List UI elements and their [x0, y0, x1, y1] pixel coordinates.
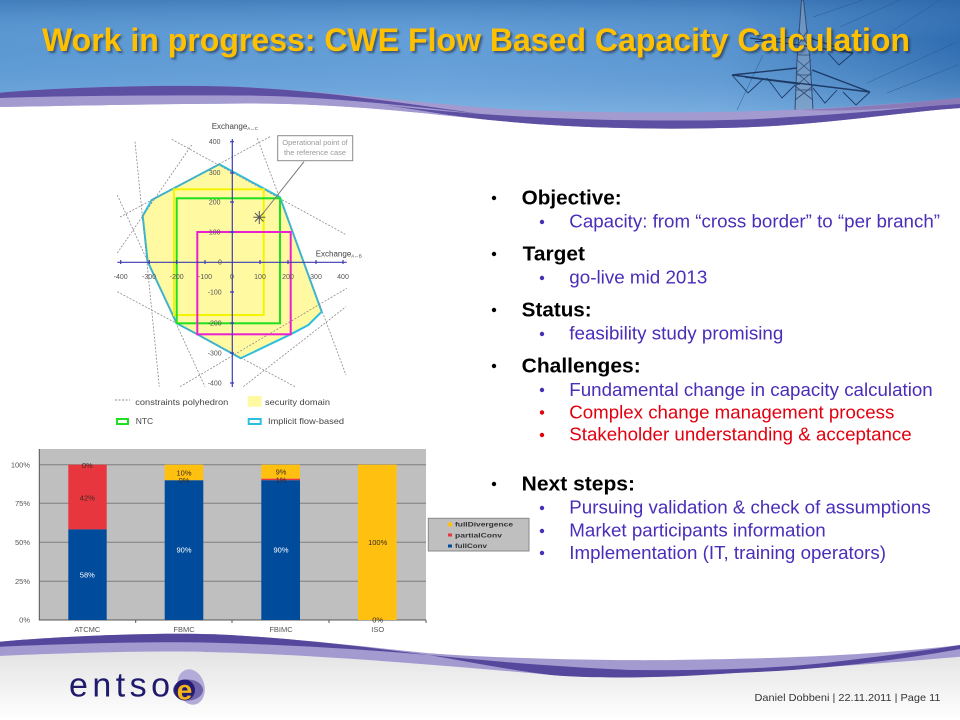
item: next steps	[492, 474, 931, 563]
flow-based domain diagram: Exchange	[316, 250, 351, 259]
y axis labels: 100%	[11, 460, 30, 470]
axis tick labels: 100	[209, 230, 221, 236]
diagram legend: NTC	[136, 416, 153, 426]
axis tick labels: -300	[208, 350, 222, 358]
item: challenges: Complex change management process	[569, 402, 894, 422]
axis tick labels: 200	[282, 274, 294, 281]
axes	[117, 139, 347, 387]
callout: operational point	[253, 136, 353, 224]
item: challenges: Fundamental change in capacity calculation	[569, 380, 933, 400]
axis tick labels: -400	[208, 380, 222, 388]
axis tick labels: 400	[337, 274, 349, 281]
value labels: 10%	[176, 468, 192, 478]
axis tick labels: 100	[254, 274, 266, 281]
value labels: 0%	[82, 461, 93, 470]
security domain polygon	[143, 164, 322, 358]
callout: operational point: the reference case	[284, 148, 346, 157]
chart legend: fullConv	[455, 543, 487, 550]
chart legend	[428, 518, 529, 551]
chart legend: partialConv	[455, 532, 502, 540]
item: challenges: Stakeholder understanding & acceptance	[569, 425, 912, 445]
chart legend: fullDivergence	[455, 522, 513, 528]
axis tick labels: 400	[209, 139, 221, 146]
axis tick labels: -100	[208, 290, 222, 296]
footer text: Daniel Dobbeni | 22.11.2011 | Page 11	[754, 692, 941, 704]
value labels	[80, 461, 388, 625]
footer band	[0, 634, 960, 720]
item: next steps: Next steps:	[522, 474, 635, 496]
axis titles: A↔C	[247, 126, 259, 131]
title: Work in progress: CWE Flow Based Capacity Calculation	[42, 22, 910, 58]
bar: FBIMC	[261, 465, 300, 620]
item: objective: Capacity: from “cross border” to “per branch”	[569, 212, 940, 232]
axis tick labels: 0	[218, 260, 222, 266]
item: status	[492, 300, 783, 343]
value labels: 100%	[368, 538, 388, 547]
y axis labels: 75%	[15, 499, 30, 508]
value labels: 0%	[179, 476, 190, 485]
item: next steps: Pursuing validation & check of assumptions	[569, 497, 931, 517]
flow-based domain diagram: A↔B	[351, 254, 362, 259]
NTC rectangles	[174, 189, 264, 315]
diagram legend	[115, 396, 344, 426]
diagram legend: constraints polyhedron	[135, 397, 229, 407]
value labels: 1%	[276, 476, 287, 484]
x axis labels: FBMC	[173, 625, 195, 634]
item: challenges	[492, 356, 933, 445]
logo: entso-e	[69, 666, 209, 708]
item: target: go-live mid 2013	[569, 267, 707, 287]
axis tick labels: -100	[198, 274, 212, 281]
item: challenges: Challenges:	[522, 356, 641, 378]
y axis labels: 0%	[19, 616, 30, 625]
x axis labels: ISO	[371, 625, 384, 634]
axis titles: Exchange	[212, 122, 247, 131]
axis tick labels: 200	[209, 200, 221, 206]
header wave	[0, 86, 960, 132]
item: objective	[492, 187, 940, 232]
y axis labels: 50%	[15, 538, 30, 547]
value labels: 0%	[372, 616, 383, 625]
item: next steps: Implementation (IT, training operators)	[569, 543, 886, 563]
value labels: 90%	[176, 546, 192, 554]
axis tick labels: 300	[209, 170, 221, 177]
axis tick labels: -400	[114, 274, 128, 281]
logo: entso-e: e	[177, 674, 192, 706]
constraint lines	[117, 137, 347, 387]
x axis labels	[74, 625, 384, 634]
axis tick labels: 0	[230, 274, 234, 281]
axis tick labels: 300	[310, 274, 322, 281]
item: next steps: Market participants information	[569, 521, 826, 541]
flow-based domain diagram	[114, 122, 362, 426]
value labels: 9%	[276, 468, 287, 476]
stacked bar chart	[11, 449, 426, 634]
x axis labels: ATCMC	[74, 625, 101, 634]
y axis labels: 25%	[15, 577, 30, 586]
value labels: 58%	[80, 570, 95, 580]
logo: entso-e: entso	[69, 667, 170, 705]
header banner	[0, 0, 960, 130]
item: status: feasibility study promising	[569, 323, 783, 343]
bar: FBMC	[165, 465, 203, 620]
y axis labels	[11, 460, 30, 625]
bar: ATCMC	[68, 465, 107, 620]
axis tick labels	[114, 139, 349, 388]
diagram legend: Implicit flow-based	[268, 416, 344, 426]
value labels: 42%	[80, 494, 95, 502]
bar: ISO	[358, 465, 397, 620]
item: target	[492, 244, 707, 287]
diagram legend: security domain	[265, 397, 330, 407]
item: objective: Objective:	[522, 187, 622, 209]
callout: operational point: Operational point of	[282, 138, 349, 147]
axis tick labels: -300	[142, 274, 156, 281]
x axis labels: FBIMC	[269, 625, 293, 634]
item: status: Status:	[522, 300, 592, 322]
axis tick labels: -200	[208, 320, 222, 328]
bullet list	[492, 187, 940, 563]
axis tick labels: -200	[170, 274, 184, 281]
value labels: 90%	[273, 546, 289, 554]
item: target: Target	[523, 244, 585, 266]
icon: transmission pylon	[732, 0, 958, 110]
